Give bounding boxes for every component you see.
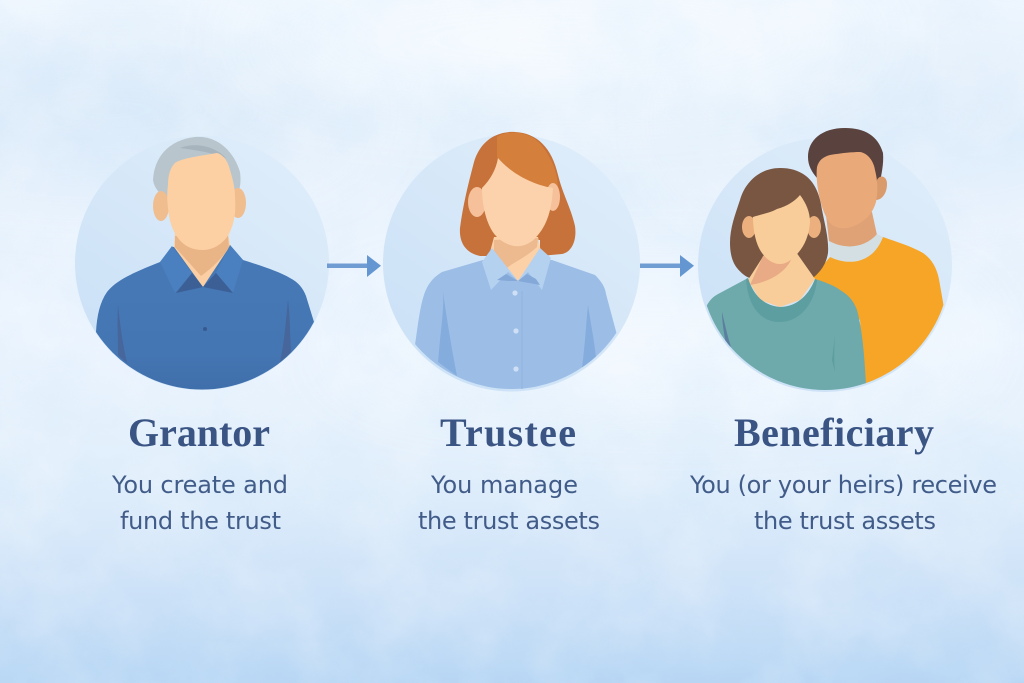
text: grantor description (111, 471, 288, 535)
heading: Trustee: Trustee (440, 410, 576, 455)
text: beneficiary description: You (or your heirs) receive (689, 471, 997, 499)
icon: grantor portrait (96, 137, 314, 400)
heading: Beneficiary: Beneficiary (734, 410, 934, 455)
text: grantor description: fund the trust (120, 507, 281, 535)
beneficiary backdrop circle (698, 138, 952, 392)
trustee backdrop circle (383, 134, 640, 392)
panel: beneficiary (698, 128, 952, 400)
heading: Grantor: Grantor (128, 410, 270, 455)
panel: trustee (383, 132, 640, 400)
arrow: grantor to trustee (327, 255, 381, 277)
arrow: trustee to beneficiary (640, 255, 694, 277)
text: trustee description (418, 471, 600, 535)
text: beneficiary description (689, 471, 997, 535)
text: trustee description: the trust assets (418, 507, 600, 535)
text: grantor description: You create and (111, 471, 288, 499)
icon: trustee portrait (415, 132, 617, 400)
panel: grantor (75, 136, 329, 400)
grantor backdrop circle (75, 136, 329, 390)
text: beneficiary description: the trust assets (754, 507, 936, 535)
icon: beneficiaries portrait (706, 128, 944, 400)
text: trustee description: You manage (430, 471, 578, 499)
